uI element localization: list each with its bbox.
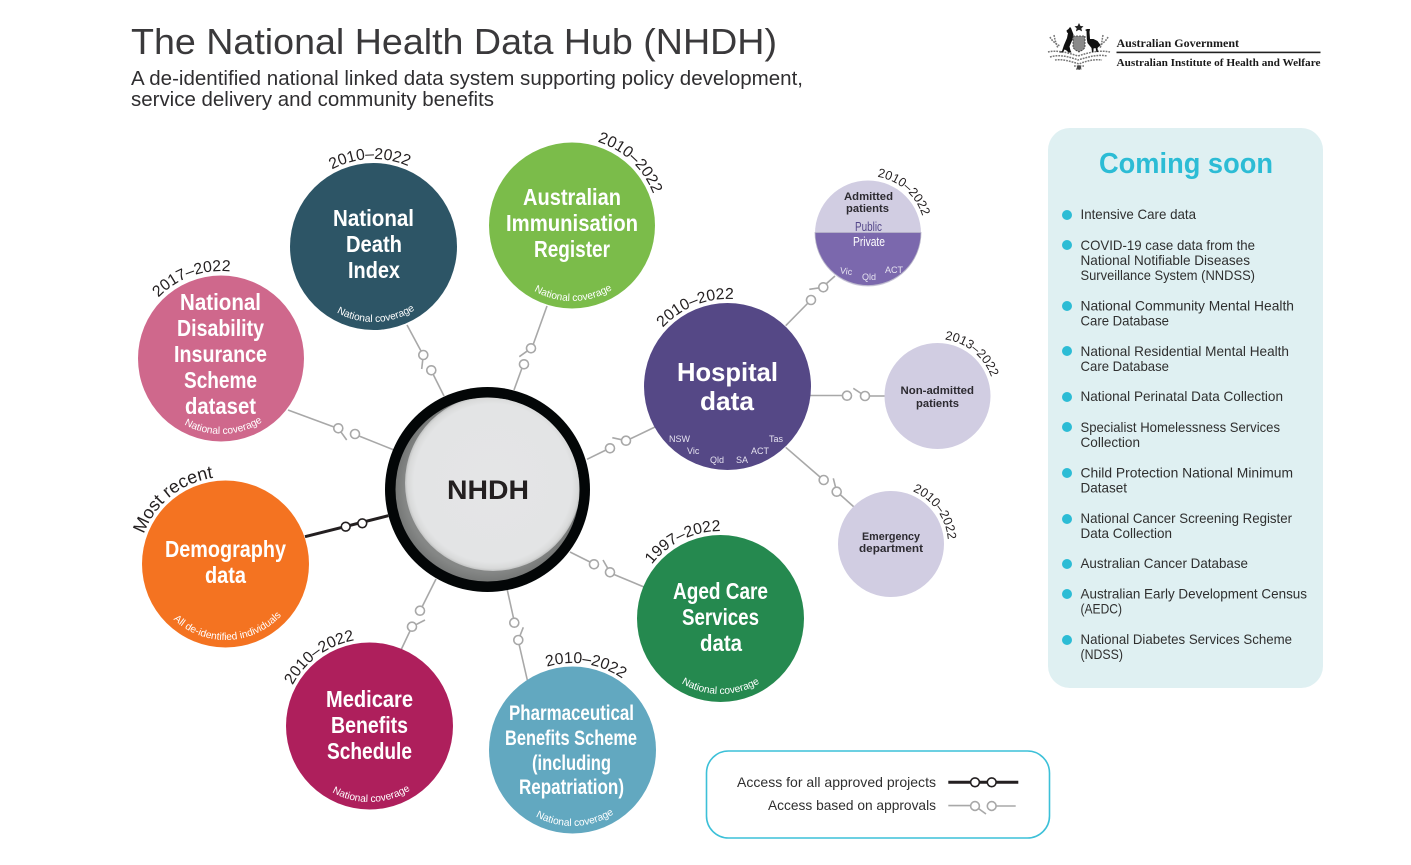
label: National (180, 289, 261, 315)
circle: NDIS dataset (138, 260, 304, 442)
label: Aged Care (673, 578, 768, 604)
list: upcoming data sets: (AEDC) (1080, 600, 1122, 616)
legend: access based on approvals: Access based on approvals (768, 797, 936, 813)
list: upcoming data sets: National Diabetes Services Scheme (1080, 631, 1292, 647)
circle: Australian Immunisation Register (489, 132, 662, 308)
years: 2017–2022 (152, 260, 230, 298)
circle: Medicare Benefits Schedule (284, 630, 453, 810)
text: NHDH: NHDH (447, 475, 529, 505)
label (326, 686, 413, 764)
label: Hospital (677, 357, 778, 387)
list: upcoming data sets: Data Collection (1080, 525, 1172, 541)
title: The National Health Data Hub (NHDH) (131, 21, 777, 62)
years: 2010–2022 (598, 132, 662, 194)
label (844, 191, 893, 215)
circle: Pharmaceutical Benefits Scheme (489, 652, 656, 834)
hub: NHDH (385, 387, 590, 592)
label: data (700, 386, 755, 416)
label (677, 357, 778, 416)
circle: Hospital data (644, 288, 811, 470)
label: Australian (523, 184, 621, 210)
years: Most recent (132, 466, 214, 533)
label: Medicare (326, 686, 413, 712)
legend: access based on approvals (768, 797, 1016, 814)
years: 2010–2022 (913, 484, 956, 539)
bullets (1062, 210, 1072, 645)
label: patients (916, 398, 959, 410)
circle: National Death Index (290, 148, 457, 330)
coverage: National coverage (534, 285, 612, 301)
coverage: National coverage (682, 678, 759, 694)
connectors: approval-based access (288, 276, 884, 680)
states: ACT (885, 265, 904, 275)
states: Vic (839, 265, 853, 277)
coverage: National coverage (184, 418, 262, 434)
list: upcoming data sets: Australian Early Development Census (1080, 586, 1307, 602)
states (839, 265, 904, 282)
icon: coat of arms (1048, 23, 1110, 70)
label (900, 385, 974, 410)
circle: Admitted patients (814, 168, 930, 286)
label: Disability (177, 315, 264, 341)
label: Insurance (174, 341, 267, 367)
label: Death (346, 231, 402, 257)
years: 2013–2022 (945, 331, 998, 376)
panel: coming soon (1048, 128, 1323, 688)
states: Qld (862, 272, 876, 282)
label: (including (532, 752, 611, 775)
label: patients (846, 203, 889, 215)
label (174, 289, 267, 419)
label: dataset (185, 393, 256, 419)
list: upcoming data sets: National Notifiable Diseases (1080, 252, 1250, 268)
list: upcoming data sets: Child Protection National Minimum (1080, 464, 1293, 480)
label: National (333, 205, 414, 231)
states: NSW (669, 434, 691, 444)
label: Register (534, 236, 610, 262)
label: Schedule (327, 738, 412, 764)
label (506, 184, 638, 262)
list: upcoming data sets: Care Database (1080, 312, 1169, 328)
text: Australian Government: Australian Government (1116, 36, 1239, 50)
public: Public (855, 219, 882, 234)
list: upcoming data sets: Collection (1080, 434, 1140, 450)
states: Tas (769, 434, 784, 444)
label: Non-admitted (900, 385, 974, 397)
label: Services (682, 604, 759, 630)
heading: coming soon: Coming soon (1099, 148, 1273, 180)
label: Pharmaceutical (509, 702, 634, 725)
subtitle: service delivery and community benefits (131, 89, 494, 111)
years: 1997–2022 (646, 520, 720, 564)
states (669, 434, 784, 465)
legend (706, 751, 1050, 838)
legend: all approved projects: Access for all approved projects (737, 774, 936, 790)
label: Benefits Scheme (505, 727, 637, 750)
label: Admitted (844, 191, 893, 203)
label: department (859, 543, 923, 555)
years: 2010–2022 (656, 288, 733, 328)
label (859, 531, 923, 555)
coverage: National coverage (536, 810, 613, 826)
list: upcoming data sets: (NDSS) (1080, 646, 1123, 662)
circle: Demography data (132, 466, 309, 648)
years: 2010–2022 (328, 148, 410, 170)
private: Private (853, 234, 885, 249)
label: Repatriation) (519, 776, 624, 799)
label: Scheme (184, 367, 257, 393)
logo: Australian Government, AIHW (1048, 23, 1321, 70)
list: upcoming data sets: Specialist Homelessness Services (1080, 419, 1280, 435)
subtitle: A de-identified national linked data system supporting policy development, (131, 68, 803, 90)
label: Index (348, 257, 400, 283)
list: upcoming data sets: National Residential Mental Health (1080, 343, 1289, 359)
list: upcoming data sets: Australian Cancer Database (1080, 555, 1248, 571)
list: upcoming data sets: COVID-19 case data from the (1080, 237, 1255, 253)
circle: Aged Care Services data (637, 520, 804, 702)
list: upcoming data sets: National Cancer Screening Register (1080, 510, 1292, 526)
label: Demography (165, 536, 286, 562)
list: upcoming data sets: Intensive Care data (1080, 206, 1196, 222)
label: Immunisation (506, 210, 638, 236)
circle: Non-admitted patients (884, 331, 998, 449)
label (505, 702, 637, 799)
label: Benefits (331, 712, 408, 738)
states: Qld (710, 455, 724, 465)
subtitle (131, 68, 803, 111)
years: 2010–2022 (546, 652, 626, 678)
coverage: National coverage (332, 786, 410, 802)
label (673, 578, 768, 656)
list: upcoming data sets (1080, 206, 1307, 662)
states: SA (736, 455, 748, 465)
states: Vic (687, 446, 700, 456)
years: 2010–2022 (284, 630, 354, 685)
list: upcoming data sets: National Community Mental Health (1080, 298, 1294, 314)
list: upcoming data sets: Surveillance System (NNDSS) (1080, 267, 1255, 283)
text: Australian Institute of Health and Welfare: Australian Institute of Health and Welfare (1116, 57, 1321, 69)
list: upcoming data sets: National Perinatal Data Collection (1080, 388, 1283, 404)
label: data (205, 562, 246, 588)
label (165, 536, 286, 588)
years: 2010–2022 (878, 168, 930, 216)
coverage: All de-identified individuals (173, 612, 281, 640)
coverage: National coverage (337, 306, 414, 322)
states: ACT (751, 446, 770, 456)
label (333, 205, 414, 283)
list: upcoming data sets: Dataset (1080, 480, 1127, 496)
circle: Emergency department (838, 484, 956, 597)
label: Emergency (862, 531, 921, 543)
connector: open access to demography (305, 516, 388, 537)
label: data (700, 630, 742, 656)
list: upcoming data sets: Care Database (1080, 358, 1169, 374)
